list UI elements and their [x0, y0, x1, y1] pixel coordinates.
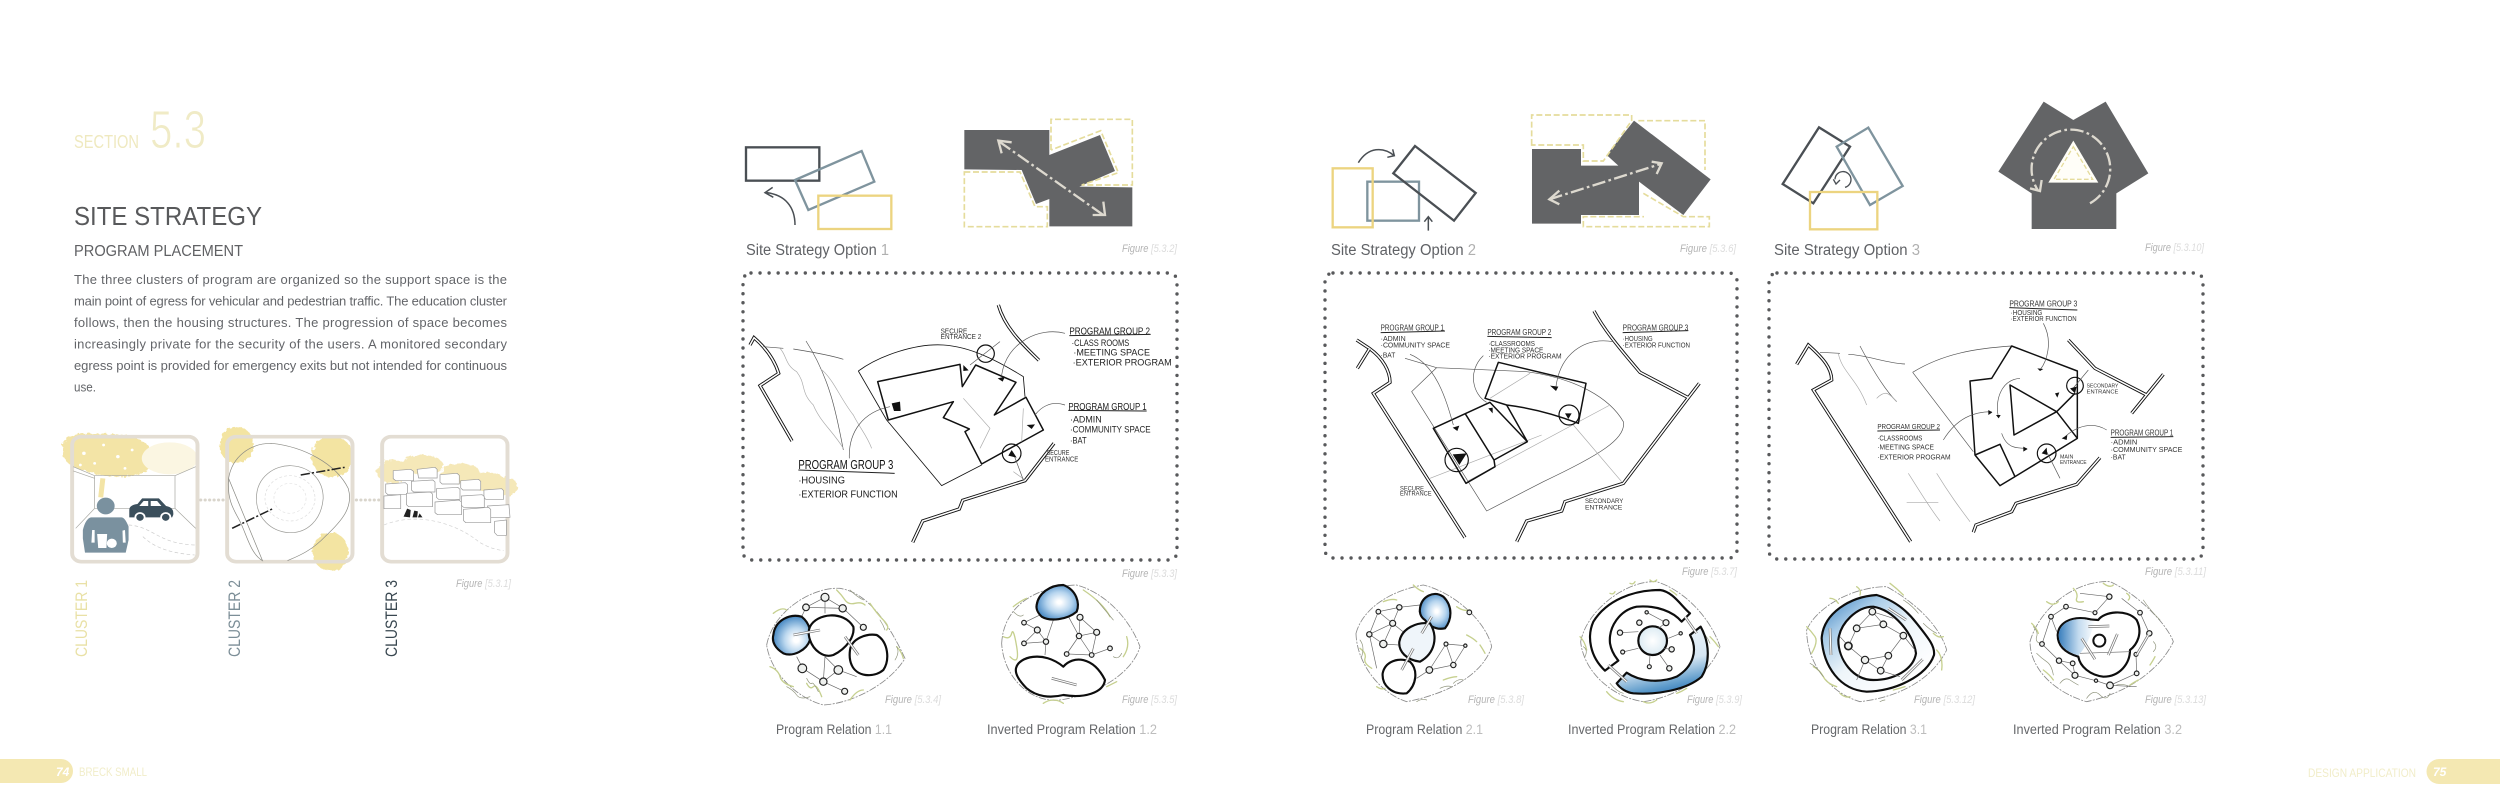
site sketch option 1: ·ADMIN: [1070, 414, 1102, 424]
cluster 1 label: CLUSTER 1: [72, 580, 91, 657]
section label: 5.3: [150, 100, 206, 160]
footer left: author: BRECK SMALL: [79, 765, 147, 779]
body text: The three clusters of program are organized so the support space is the: [74, 272, 507, 287]
option 2 site plan: [1532, 115, 1711, 227]
relation 3.2 figure label: Figure [5.3.13]: [2145, 694, 2207, 706]
site sketch option 1: ·COMMUNITY SPACE: [1070, 424, 1151, 434]
program relation 3.2 bubble diagram: [2030, 582, 2173, 702]
relation 1.2 caption: Inverted Program Relation 1.2: [987, 722, 1157, 737]
site sketch option 1: ·HOUSING: [798, 475, 845, 486]
relation 2.2 figure label: Figure [5.3.9]: [1687, 694, 1743, 706]
site sketch option 2: PROGRAM GROUP 1: [1381, 323, 1444, 333]
site sketch option 2: SECURE: [1400, 486, 1424, 492]
dotted frame option 1: [743, 273, 1177, 560]
relation 2.1 caption: Program Relation 2.1: [1366, 722, 1483, 737]
site sketch option 1: SECURE: [941, 328, 968, 335]
site sketch option 2: ·EXTERIOR FUNCTION: [1623, 343, 1690, 350]
figure label 5.3.6: Figure [5.3.6]: [1680, 243, 1737, 255]
program relation 2.1 bubble diagram: [1356, 585, 1492, 702]
option 3 site plan: [1998, 102, 2148, 229]
site sketch option 3: ·EXTERIOR FUNCTION: [2011, 316, 2077, 323]
relation 3.2 caption: Inverted Program Relation 3.2: [2013, 722, 2182, 737]
site sketch option 2: ·MEETING SPACE: [1488, 347, 1544, 354]
site sketch option 1: PROGRAM GROUP 3: [798, 458, 893, 472]
section label: SECTION: [74, 132, 139, 152]
cluster 3 illustration: [377, 437, 517, 562]
relation 3.1 caption: Program Relation 3.1: [1811, 722, 1927, 737]
site sketch option 3: [1797, 299, 2183, 542]
site sketch option 1: ·EXTERIOR FUNCTION: [798, 490, 898, 501]
section label: [74, 100, 206, 160]
footer right: section name: DESIGN APPLICATION: [2308, 766, 2416, 780]
site sketch option 2: ENTRANCE: [1400, 492, 1432, 498]
site sketch option 3: PROGRAM GROUP 1: [2111, 427, 2174, 437]
site sketch option 3: PROGRAM GROUP 3: [2009, 299, 2078, 309]
cluster 2 label: CLUSTER 2: [225, 580, 244, 657]
connector: [201, 495, 226, 504]
option 1 site plan: [964, 119, 1132, 227]
body text: egress point is provided for emergency exits but not intended for continuous: [74, 358, 508, 373]
site sketch option 2: SECONDARY: [1585, 499, 1623, 505]
relation 1.1 figure label: Figure [5.3.4]: [885, 694, 942, 706]
site sketch option 1: PROGRAM GROUP 2: [1069, 326, 1150, 337]
option 3 caption: Site Strategy Option 3: [1774, 242, 1920, 259]
site sketch option 1: ·BAT: [1070, 435, 1087, 445]
figure label 5.3.7: Figure [5.3.7]: [1682, 566, 1738, 578]
site sketch option 1: ENTRANCE 2: [941, 334, 981, 341]
relation 3.1 figure label: Figure [5.3.12]: [1914, 694, 1976, 706]
site sketch option 2: ·COMMUNITY SPACE: [1381, 342, 1450, 349]
figure label 5.3.1: Figure [5.3.1]: [456, 578, 512, 590]
connector: [356, 495, 380, 504]
site sketch option 2: ·EXTERIOR PROGRAM: [1488, 353, 1562, 360]
relation 2.2 caption: Inverted Program Relation 2.2: [1568, 722, 1736, 737]
site sketch option 3: SECONDARY: [2087, 384, 2119, 390]
icon: car: [129, 498, 173, 522]
site sketch option 2: ·BAT: [1381, 353, 1396, 360]
site sketch option 1: ·CLASS ROOMS: [1072, 338, 1129, 348]
site sketch option 2: PROGRAM GROUP 2: [1487, 327, 1552, 337]
site sketch option 1: PROGRAM GROUP 1: [1068, 402, 1147, 413]
site sketch option 3: ·ADMIN: [2111, 439, 2137, 446]
site sketch option 1: [750, 305, 1172, 542]
site sketch option 3: PROGRAM GROUP 2: [1877, 422, 1940, 431]
relation 1.2 figure label: Figure [5.3.5]: [1122, 694, 1178, 706]
site sketch option 1: ·EXTERIOR PROGRAM: [1073, 358, 1172, 368]
option 2 massing diagram: [1333, 146, 1476, 231]
site sketch option 3: ·EXTERIOR PROGRAM: [1877, 455, 1951, 462]
site sketch option 3: ·MEETING SPACE: [1877, 444, 1934, 451]
footer right: page number tab: 75: [2433, 765, 2447, 779]
site sketch option 2: ·ADMIN: [1381, 336, 1406, 343]
body text: main point of egress for vehicular and pedestrian traffic. The education cluster: [74, 294, 508, 308]
icon: person at table: [83, 498, 129, 553]
site sketch option 2: ·HOUSING: [1623, 336, 1653, 343]
figure label 5.3.10: Figure [5.3.10]: [2145, 242, 2205, 254]
site sketch option 3: ·CLASSROOMS: [1877, 435, 1923, 442]
site sketch option 3: ·HOUSING: [2011, 310, 2042, 317]
program relation 1.1 bubble diagram: [767, 588, 905, 705]
program relation 1.2 bubble diagram: [1002, 585, 1140, 703]
figure label 5.3.2: Figure [5.3.2]: [1122, 243, 1178, 255]
cluster 3 label: CLUSTER 3: [382, 580, 401, 657]
site sketch option 2: [1357, 311, 1699, 542]
site sketch option 1: ·MEETING SPACE: [1073, 348, 1150, 358]
site sketch option 2: ·CLASSROOMS: [1488, 341, 1535, 348]
figure label 5.3.11: Figure [5.3.11]: [2145, 566, 2207, 578]
site sketch option 1: ENTRANCE: [1045, 457, 1079, 464]
program relation 2.2 bubble diagram: [1580, 580, 1720, 703]
site sketch option 2: ENTRANCE: [1585, 506, 1622, 512]
footer right: page number tab: [2426, 759, 2500, 784]
dotted frame option 2: [1325, 273, 1737, 558]
body text: increasingly private for the security of the users. A monitored secondary: [74, 336, 508, 352]
option 1 massing diagram: [746, 147, 891, 229]
program relation 3.1 bubble diagram: [1807, 583, 1947, 702]
site sketch option 3: MAIN: [2060, 454, 2073, 460]
option 2 caption: Site Strategy Option 2: [1331, 242, 1476, 259]
site sketch option 3: ENTRANCE: [2087, 390, 2119, 396]
figure label 5.3.3: Figure [5.3.3]: [1122, 568, 1178, 580]
title: SITE STRATEGY: [74, 203, 262, 231]
relation 1.1 caption: Program Relation 1.1: [776, 722, 892, 737]
footer left: page number tab: 74: [56, 765, 70, 779]
option 1 caption: Site Strategy Option 1: [746, 242, 889, 259]
cluster 2 illustration: [219, 427, 353, 571]
relation 2.1 figure label: Figure [5.3.8]: [1468, 694, 1525, 706]
dotted frame option 3: [1769, 273, 2203, 559]
body text: use.: [74, 380, 96, 394]
body text: follows, then the housing structures. The progression of space becomes: [74, 315, 508, 330]
body text: [74, 272, 508, 394]
site sketch option 1: SECURE: [1047, 450, 1070, 457]
site sketch option 3: ENTRANCE: [2060, 460, 2087, 466]
site sketch option 3: ·COMMUNITY SPACE: [2111, 447, 2183, 454]
cluster 1 illustration: [62, 433, 197, 562]
footer left: page number tab: [0, 759, 73, 783]
site sketch option 2: PROGRAM GROUP 3: [1623, 323, 1689, 333]
option 3 massing diagram: [1783, 127, 1903, 229]
subheading: PROGRAM PLACEMENT: [74, 243, 243, 260]
site sketch option 3: ·BAT: [2111, 454, 2126, 461]
cluster diagrams: [62, 427, 517, 571]
